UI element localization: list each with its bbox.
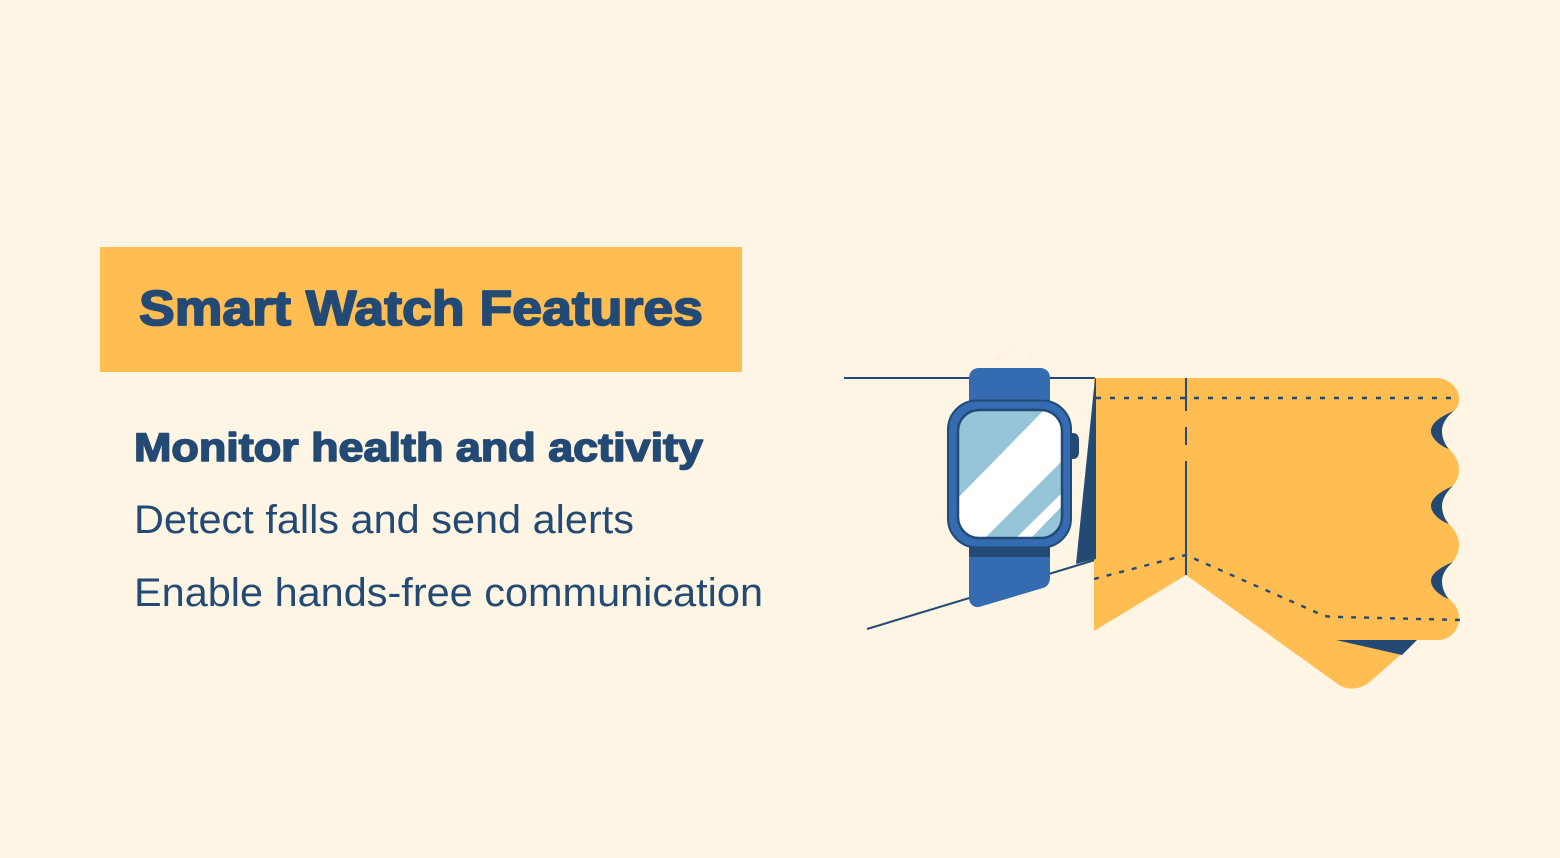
lower strap	[969, 546, 1050, 607]
hand crease lines	[1094, 378, 1460, 620]
finger fold shadow	[1336, 640, 1417, 655]
feature list	[134, 426, 763, 615]
wrist shadow	[1076, 378, 1096, 564]
title banner	[100, 247, 742, 372]
infographic canvas	[100, 247, 1460, 689]
upper strap	[969, 368, 1050, 402]
watch	[948, 368, 1079, 607]
watch screen	[954, 408, 1066, 539]
arm outline	[844, 378, 1095, 629]
faint motion marks above watch	[995, 350, 1031, 360]
hand shape	[1094, 378, 1459, 689]
watch case	[948, 400, 1071, 548]
strap shadow	[969, 546, 1050, 557]
knuckle crescents	[1431, 411, 1454, 599]
feature: monitor health: Monitor health and activity	[134, 426, 704, 470]
illustration: wrist with smart watch	[844, 350, 1460, 689]
crown	[1070, 433, 1079, 459]
feature: detect falls: Detect falls and send alerts	[134, 498, 634, 542]
feature: communication: Enable hands-free communication	[134, 571, 763, 615]
title: Smart Watch Features	[139, 282, 703, 336]
